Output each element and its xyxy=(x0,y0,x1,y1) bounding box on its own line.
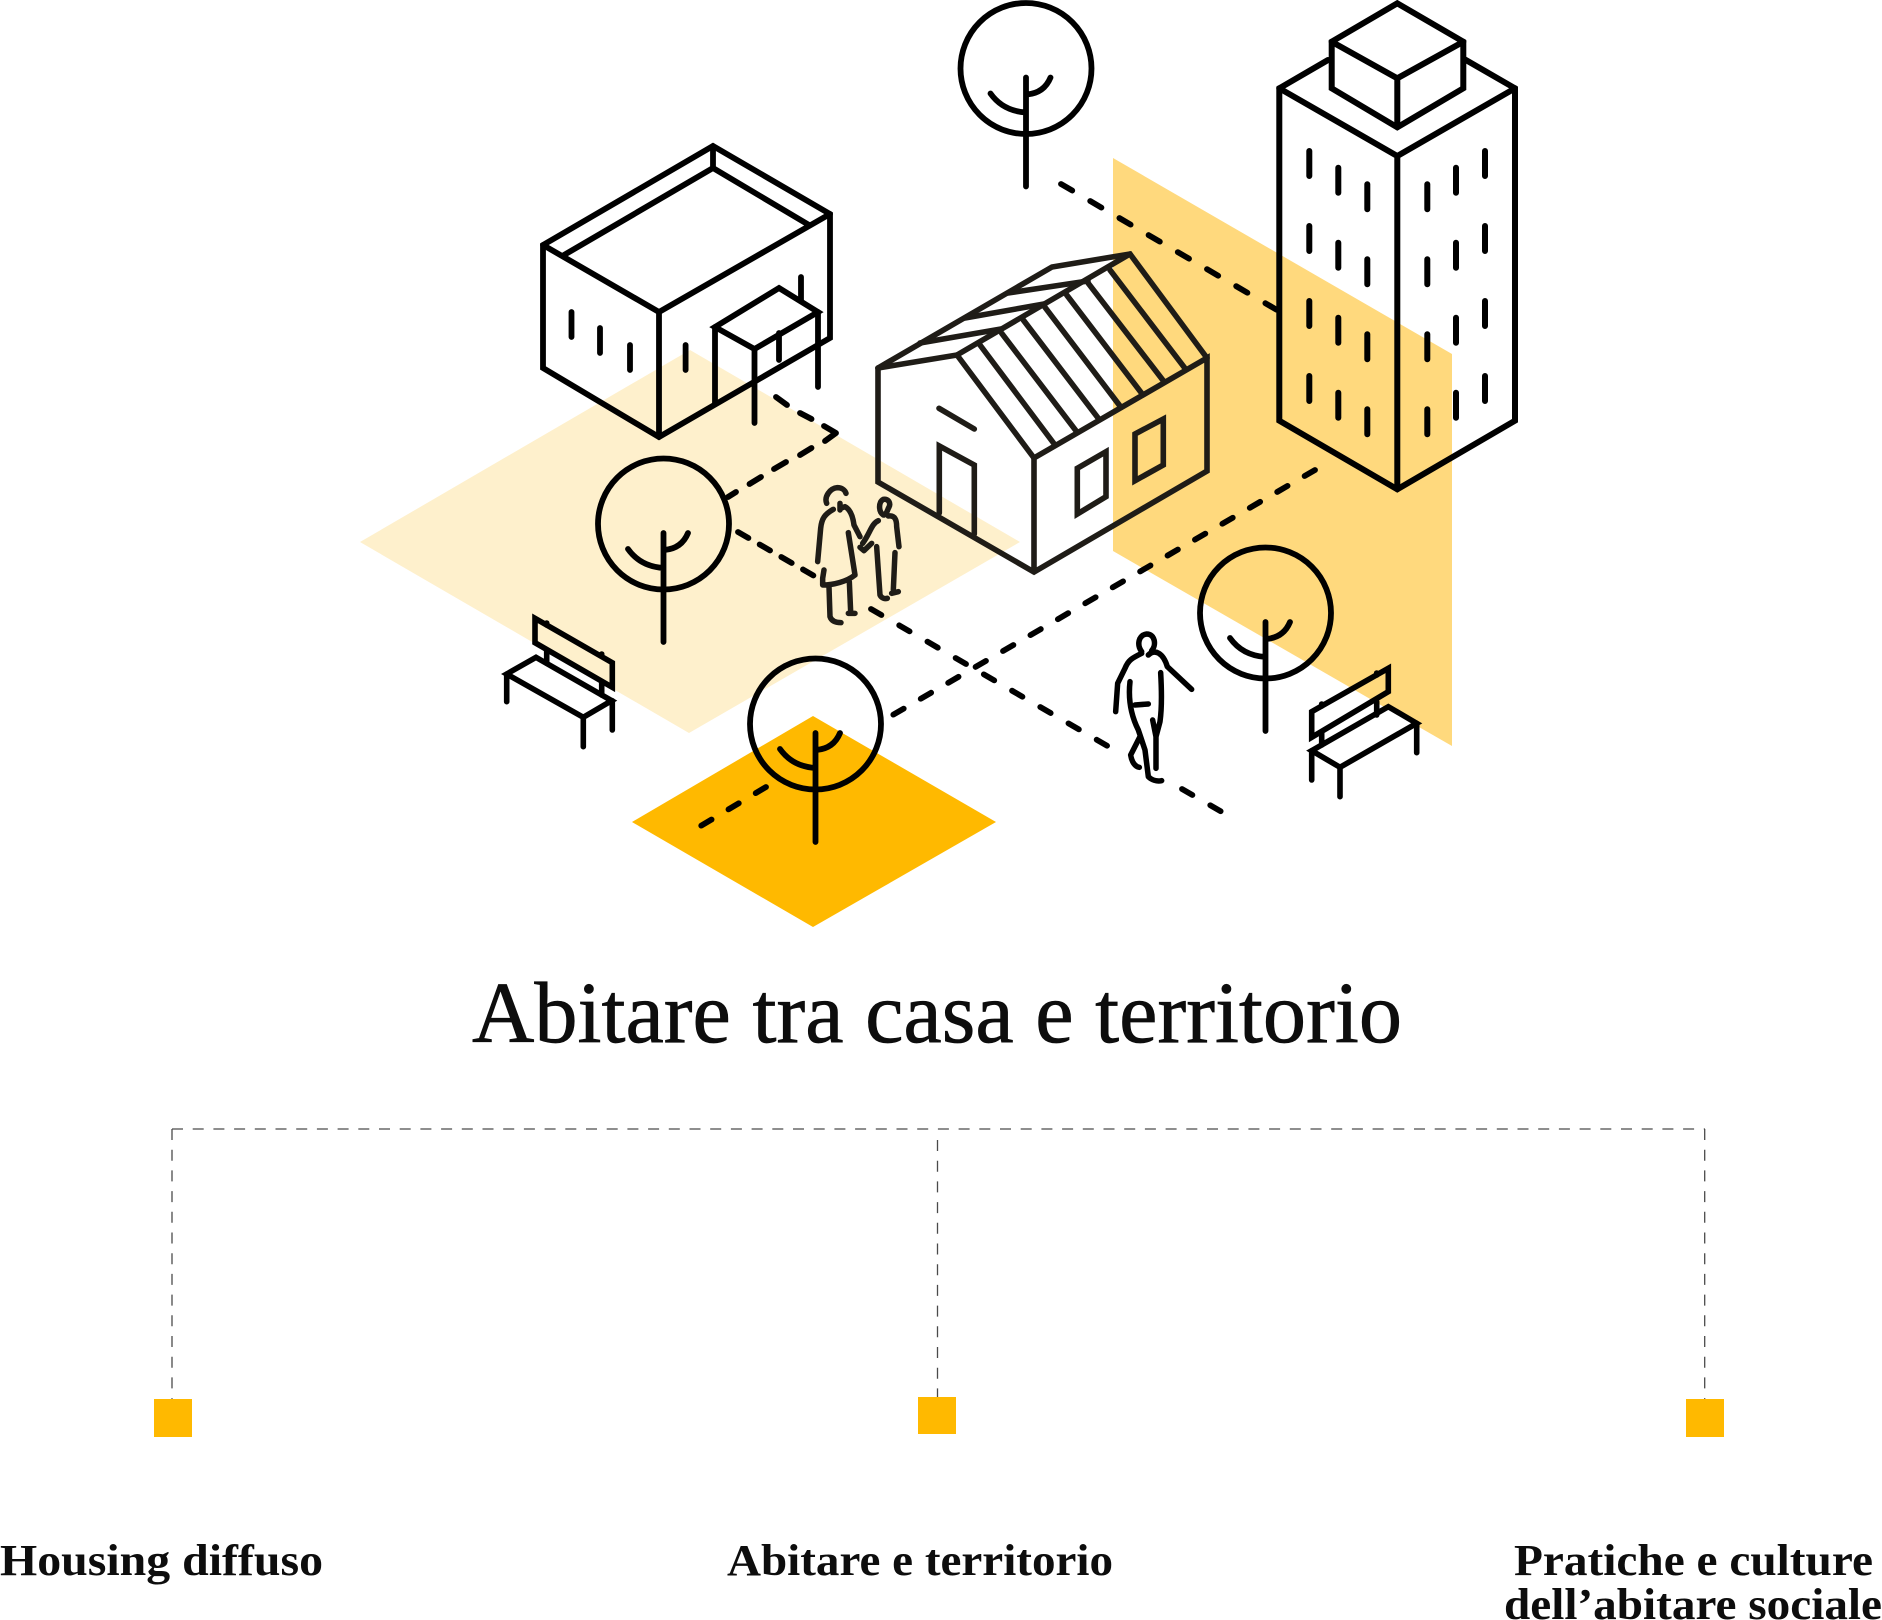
icon: house with pitched roof xyxy=(878,254,1207,572)
icon: tree bottom xyxy=(750,658,881,842)
title: Abitare tra casa e territorio xyxy=(472,964,1402,1061)
icon: bench left xyxy=(507,618,612,747)
icon: walking person xyxy=(1116,634,1192,781)
dashed connector tree xyxy=(172,1129,1705,1399)
saturated yellow ground plane xyxy=(632,716,996,927)
icon: tree right xyxy=(1200,548,1331,731)
dashed path: top tree to tower xyxy=(1061,184,1277,310)
pale yellow ground plane xyxy=(360,350,1020,733)
woman xyxy=(818,488,860,623)
label: pratiche e culture dell'abitare sociale xyxy=(1504,1536,1882,1620)
dashed path: between low building and left tree xyxy=(728,397,836,497)
marker: housing diffuso xyxy=(154,1399,192,1437)
mid yellow vertical plane xyxy=(1113,158,1452,746)
icon: couple of people xyxy=(818,488,899,623)
dashed path: left tree toward walking figure xyxy=(738,532,1222,812)
icon: bench right xyxy=(1312,668,1417,797)
dashed path: tower toward bottom tree xyxy=(699,470,1315,827)
icon: tower xyxy=(1279,3,1515,489)
label: housing diffuso: Housing diffuso xyxy=(0,1536,323,1585)
man xyxy=(860,499,899,599)
marker: pratiche e culture xyxy=(1686,1399,1724,1437)
label: abitare e territorio: Abitare e territorio xyxy=(727,1536,1113,1585)
icon: tree top xyxy=(960,3,1092,186)
icon: low flat-roof building xyxy=(543,146,830,437)
icon: tree left xyxy=(598,458,729,642)
marker: abitare e territorio xyxy=(918,1397,956,1434)
label: pratiche e culture dell'abitare sociale: Pratiche e culture xyxy=(1514,1536,1873,1585)
